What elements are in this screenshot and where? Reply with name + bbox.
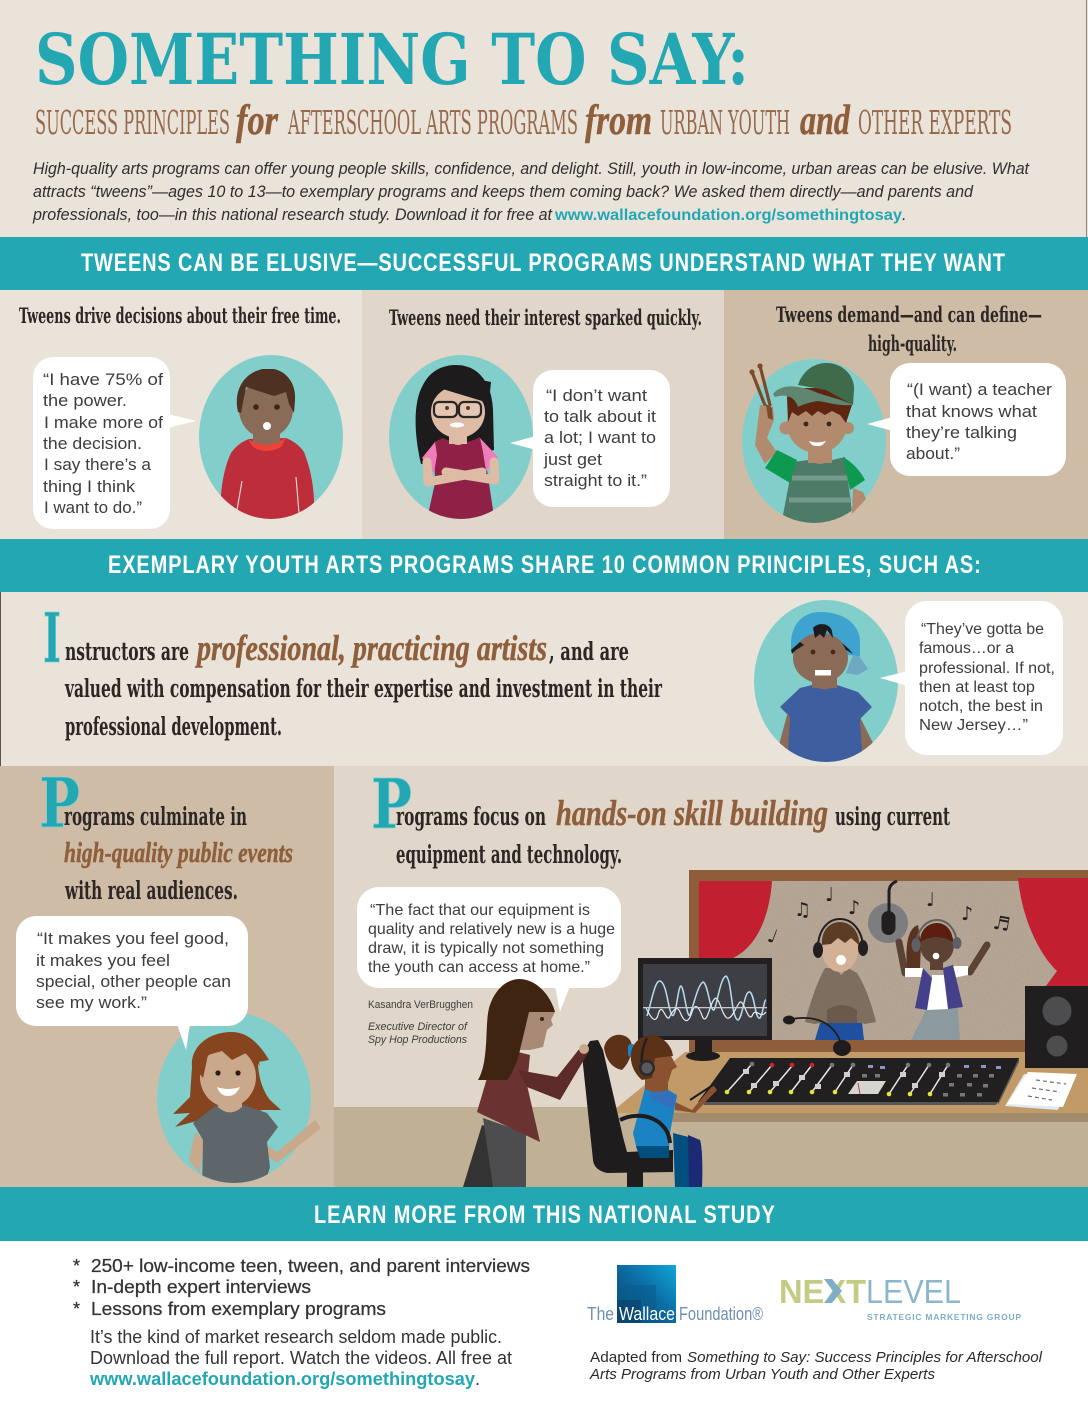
icon: boy in red sweater	[199, 355, 343, 530]
speech bubble with attribution	[357, 887, 621, 1046]
panel: hands-on skill building principle	[334, 765, 1088, 1187]
subtitle: from	[585, 98, 652, 144]
drop cap I: I	[43, 599, 61, 679]
principle text: hands-on skill building	[556, 793, 828, 833]
download text	[89, 1327, 512, 1389]
logo: The Wallace Foundation: Wallace	[619, 1304, 675, 1324]
header panel	[0, 0, 1088, 237]
icon: smiling girl waving	[157, 1013, 321, 1190]
principle text: using current	[835, 802, 950, 831]
banner: tweens can be elusive	[0, 237, 1088, 290]
VU meter	[848, 1081, 886, 1094]
intro text: attracts “tweens”—ages 10 to 13—to exemplary programs and keeps them coming back? We asked them directly—and parents and	[33, 183, 974, 201]
source citation	[589, 1350, 1043, 1383]
faders	[727, 1064, 948, 1094]
study bullet list: In-depth expert interviews	[91, 1277, 311, 1297]
speech bubble: just get	[543, 450, 602, 469]
heading: Tweens need their interest sparked quickly.	[389, 305, 702, 330]
subtitle: for	[236, 98, 279, 144]
footer background	[0, 1241, 1088, 1408]
subtitle: SUCCESS PRINCIPLES	[35, 103, 230, 142]
seated girl	[604, 1035, 717, 1187]
speech bubble with attribution: “The fact that our equipment is	[370, 902, 590, 919]
music notes: ♪	[961, 903, 973, 925]
intro text: professionals, too—in this national research study. Download it for free at	[32, 206, 553, 224]
principle text: rograms focus on	[396, 802, 546, 831]
study bullet list: *	[73, 1277, 80, 1297]
principle text	[64, 628, 663, 741]
speech bubble: that knows what	[906, 402, 1037, 421]
desk microphone	[783, 1016, 851, 1056]
principle text: valued with compensation for their expertise and investment in their	[64, 674, 663, 703]
banner: learn more: LEARN MORE FROM THIS NATIONAL STUDY	[314, 1201, 775, 1229]
speech bubble with attribution: Kasandra VerBrugghen	[368, 999, 473, 1011]
study bullet list: *	[73, 1299, 80, 1319]
speech bubble: “It makes you feel good,	[37, 929, 229, 948]
download text: www.wallacefoundation.org/somethingtosay	[89, 1369, 475, 1389]
download text: Download the full report. Watch the videos. All free at	[90, 1348, 512, 1368]
speaker	[1025, 986, 1088, 1068]
download text: It’s the kind of market research seldom made public.	[90, 1327, 502, 1347]
speech bubble: special, other people can	[36, 972, 231, 991]
speech bubble	[867, 363, 1066, 476]
speech bubble: famous…or a	[919, 640, 1014, 657]
principle text	[396, 793, 950, 869]
logo: Next Level: LEVEL	[866, 1273, 961, 1310]
logo: The Wallace Foundation: The	[587, 1304, 614, 1324]
music notes: ♪	[848, 897, 860, 919]
logo: The Wallace Foundation: Foundation®	[679, 1304, 763, 1324]
icon: boy with backwards cap	[754, 600, 898, 770]
floor	[334, 1107, 1088, 1187]
drop cap P: P	[39, 764, 80, 844]
office chair	[582, 1040, 673, 1187]
intro text: www.wallacefoundation.org/somethingtosay	[554, 207, 902, 224]
hanging microphone	[868, 881, 908, 943]
speech bubble: then at least top	[919, 679, 1035, 696]
speech bubble: “I have 75% of	[43, 370, 163, 389]
notes on paper	[1005, 1072, 1077, 1110]
banner: learn more	[0, 1187, 1088, 1241]
speech bubble: notch, the best in	[919, 698, 1043, 715]
speech bubble with attribution: draw, it is typically not something	[368, 940, 604, 957]
heading	[776, 302, 1042, 356]
speech bubble: the power.	[43, 391, 127, 410]
speech bubble with attribution: Spy Hop Productions	[368, 1034, 467, 1046]
subtitle: and	[800, 98, 851, 144]
speech bubble: thing I think	[43, 477, 136, 496]
heading: Tweens drive decisions about their free time.	[19, 303, 341, 328]
speech bubble: see my work.”	[36, 993, 147, 1012]
speech bubble: about.”	[906, 444, 960, 463]
intro text	[32, 160, 1030, 224]
speech bubble: I make more of	[44, 413, 163, 432]
study bullet list	[73, 1256, 530, 1319]
singer girl	[899, 920, 987, 1040]
principle text: rograms culminate in	[64, 802, 247, 831]
subtitle: AFTERSCHOOL ARTS PROGRAMS	[288, 103, 578, 142]
panel: public events principle	[0, 764, 334, 1190]
banner: tweens can be elusive: TWEENS CAN BE ELUSIVE—SUCCESSFUL PROGRAMS UNDERSTAND WHAT THEY WANT	[81, 249, 1005, 277]
teacher	[463, 979, 589, 1187]
source citation: Something to Say: Success Principles for Afterschool	[687, 1350, 1043, 1366]
speech bubble with attribution: quality and relatively new is a huge	[368, 921, 615, 938]
principle text: professional, practicing artists	[195, 628, 547, 668]
intro text: High-quality arts programs can offer young people skills, confidence, and delight. Still, youth in low-income, urban areas can be elusive. What	[33, 160, 1030, 178]
music notes: ♫	[794, 899, 811, 921]
banner: 10 common principles	[0, 539, 1088, 592]
logo: The Wallace Foundation	[587, 1265, 763, 1324]
principle text: , and are	[549, 637, 629, 666]
speech bubble: it makes you feel	[36, 951, 170, 970]
speech bubble	[33, 357, 196, 529]
speech bubble	[510, 370, 670, 507]
subtitle	[35, 98, 1012, 144]
speech bubble: straight to it.”	[544, 471, 647, 490]
speech bubble: I want to do.”	[44, 498, 142, 517]
music notes: ♩	[926, 889, 935, 911]
principle text: high-quality public events	[64, 837, 293, 869]
study bullet list: Lessons from exemplary programs	[91, 1299, 386, 1319]
desk	[614, 1052, 1088, 1122]
logo: Next Level	[779, 1273, 1021, 1322]
study bullet list: 250+ low-income teen, tween, and parent interviews	[91, 1256, 530, 1276]
music notes: ♩	[765, 925, 781, 948]
speech bubble: New Jersey…”	[919, 717, 1028, 734]
principle text: with real audiences.	[64, 876, 238, 905]
music notes	[765, 884, 1012, 948]
icon: girl with glasses	[389, 355, 533, 530]
title: SOMETHING TO SAY:	[35, 18, 749, 101]
speech bubble: I say there’s a	[44, 455, 152, 474]
principle text: nstructors are	[65, 637, 189, 666]
subtitle: URBAN YOUTH	[660, 103, 790, 142]
speech bubble: “They’ve gotta be	[921, 621, 1044, 638]
music notes: ♩	[825, 884, 834, 906]
mixing board	[698, 1058, 1019, 1105]
speech bubble: to talk about it	[544, 407, 656, 426]
speech bubble with attribution: Executive Director of	[368, 1021, 468, 1033]
intro text: .	[902, 206, 907, 224]
speech bubble: the decision.	[43, 434, 142, 453]
source citation: Adapted from	[590, 1350, 682, 1366]
logo: Next Level: NEXT	[779, 1273, 866, 1310]
logo: Next Level: STRATEGIC MARKETING GROUP	[867, 1312, 1021, 1322]
speech bubble: a lot; I want to	[544, 428, 656, 447]
principle text	[64, 802, 293, 905]
singer boy	[805, 919, 876, 1040]
speech bubble with attribution: the youth can access at home.”	[368, 959, 590, 976]
monitor with waveform	[638, 958, 772, 1061]
panel: tweens drive decisions	[0, 290, 362, 539]
curtains	[699, 878, 1088, 990]
drop cap P: P	[371, 765, 412, 845]
speech bubble: “(I want) a teacher	[907, 380, 1052, 399]
banner: 10 common principles: EXEMPLARY YOUTH ARTS PROGRAMS SHARE 10 COMMON PRINCIPLES, SUCH AS:	[108, 551, 981, 579]
study bullet list: *	[73, 1256, 80, 1276]
speech bubble: “I don’t want	[546, 386, 647, 405]
download text: .	[475, 1369, 480, 1389]
studio window	[689, 870, 1088, 1052]
panel: tweens need interest sparked	[362, 290, 724, 539]
heading: high-quality.	[868, 331, 957, 356]
speech bubble	[16, 916, 248, 1050]
principle text: professional development.	[65, 712, 282, 741]
speech bubble: they’re talking	[906, 423, 1017, 442]
panel: instructors principle	[0, 592, 1088, 770]
music notes: ♬	[991, 912, 1012, 936]
speech bubble: professional. If not,	[919, 660, 1055, 677]
speech bubble	[880, 601, 1063, 755]
source citation: Arts Programs from Urban Youth and Other Experts	[589, 1367, 935, 1383]
panel: tweens demand quality	[724, 290, 1088, 539]
principle text: equipment and technology.	[396, 840, 622, 869]
icon: boy with cap and drumsticks	[742, 359, 886, 530]
